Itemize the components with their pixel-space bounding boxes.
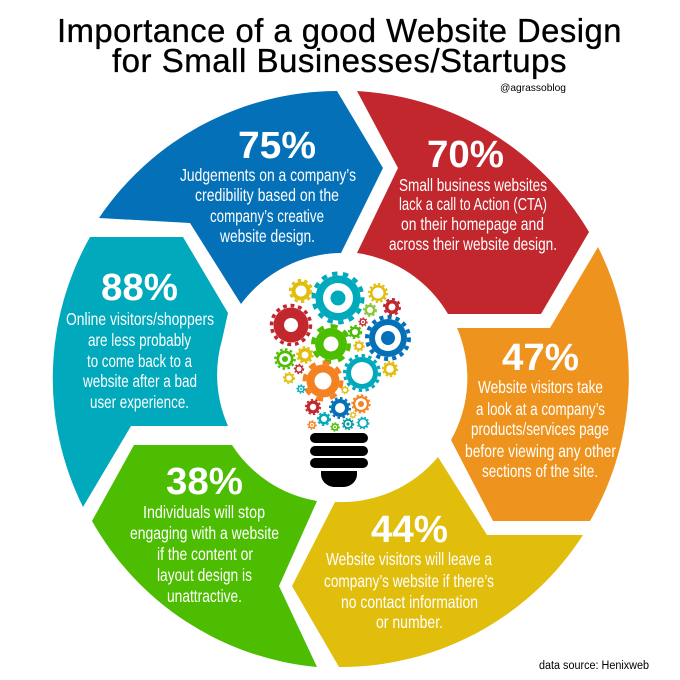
description: credibility judgements [180, 165, 356, 246]
panel: 38% green segment [92, 445, 317, 667]
title: Importance of a good Website Design [57, 12, 622, 49]
description: bad user experience [66, 309, 214, 412]
description: unattractive design: unattractive. [167, 586, 242, 606]
stat: 44%: 44% [371, 509, 448, 551]
description: missing call to action [389, 175, 557, 254]
orange segment shape [451, 247, 629, 521]
description: products and services page: sections of the site. [482, 461, 598, 481]
bulb screw base [310, 433, 368, 487]
description: unattractive design: engaging with a website [130, 523, 279, 543]
panel: 88% teal segment [53, 237, 228, 507]
description: unattractive design: Individuals will stop [143, 502, 265, 522]
stat: 75%: 75% [238, 125, 316, 167]
panel: 75% blue segment [99, 91, 383, 304]
description: unattractive design: if the content or [157, 544, 253, 564]
description: missing call to action: on their homepage and [401, 214, 544, 234]
description: credibility judgements: credibility based on the [195, 185, 339, 205]
panel: 70% red segment [357, 91, 589, 314]
title: for Small Businesses/Startups [112, 42, 567, 79]
description: bad user experience: to come back to a [87, 351, 192, 371]
teal segment shape [53, 237, 228, 507]
stat: 47%: 47% [502, 337, 579, 379]
description: credibility judgements: company’s creative [210, 206, 324, 226]
description: products and services page: before viewing any other [465, 441, 616, 461]
description: missing call to action: across their website design. [389, 234, 557, 254]
description: contact information: or number. [376, 612, 443, 632]
description: contact information [324, 549, 494, 632]
title [57, 12, 622, 79]
yellow segment shape [292, 457, 583, 667]
description: products and services page: products/services page [471, 419, 609, 439]
source note: data source: Henixweb [539, 660, 649, 672]
description: bad user experience: Online visitors/shoppers [66, 309, 214, 329]
description: products and services page: a look at a company’s [476, 399, 605, 419]
description: credibility judgements: website design. [219, 226, 315, 246]
description: contact information: Website visitors will leave a [326, 549, 492, 569]
description: bad user experience: website after a bad [82, 371, 197, 391]
description: products and services page [465, 377, 616, 481]
description: unattractive design [130, 502, 279, 606]
red segment shape [357, 91, 589, 314]
description: missing call to action: lack a call to Action (CTA) [399, 194, 547, 214]
description: products and services page: Website visitors take [478, 377, 603, 397]
stat: 70%: 70% [427, 134, 504, 176]
description: bad user experience: user experience. [90, 392, 189, 412]
gear cluster [272, 274, 409, 431]
panel: 47% orange segment [451, 247, 629, 521]
green segment shape [92, 445, 317, 667]
icon: lightbulb made of gears [272, 274, 409, 487]
description: missing call to action: Small business websites [399, 175, 547, 195]
blue segment shape [99, 91, 383, 304]
attribution: @agrassoblog: @agrassoblog [500, 82, 566, 94]
stat: 38%: 38% [166, 461, 243, 503]
stat: 88%: 88% [101, 267, 178, 309]
panel: 44% yellow segment [292, 457, 583, 667]
description: credibility judgements: Judgements on a company’s [180, 165, 356, 185]
description: unattractive design: layout design is [157, 565, 252, 585]
description: bad user experience: are less probably [88, 330, 191, 350]
description: contact information: company’s website if there’s [324, 571, 494, 591]
description: contact information: no contact information [341, 592, 478, 612]
